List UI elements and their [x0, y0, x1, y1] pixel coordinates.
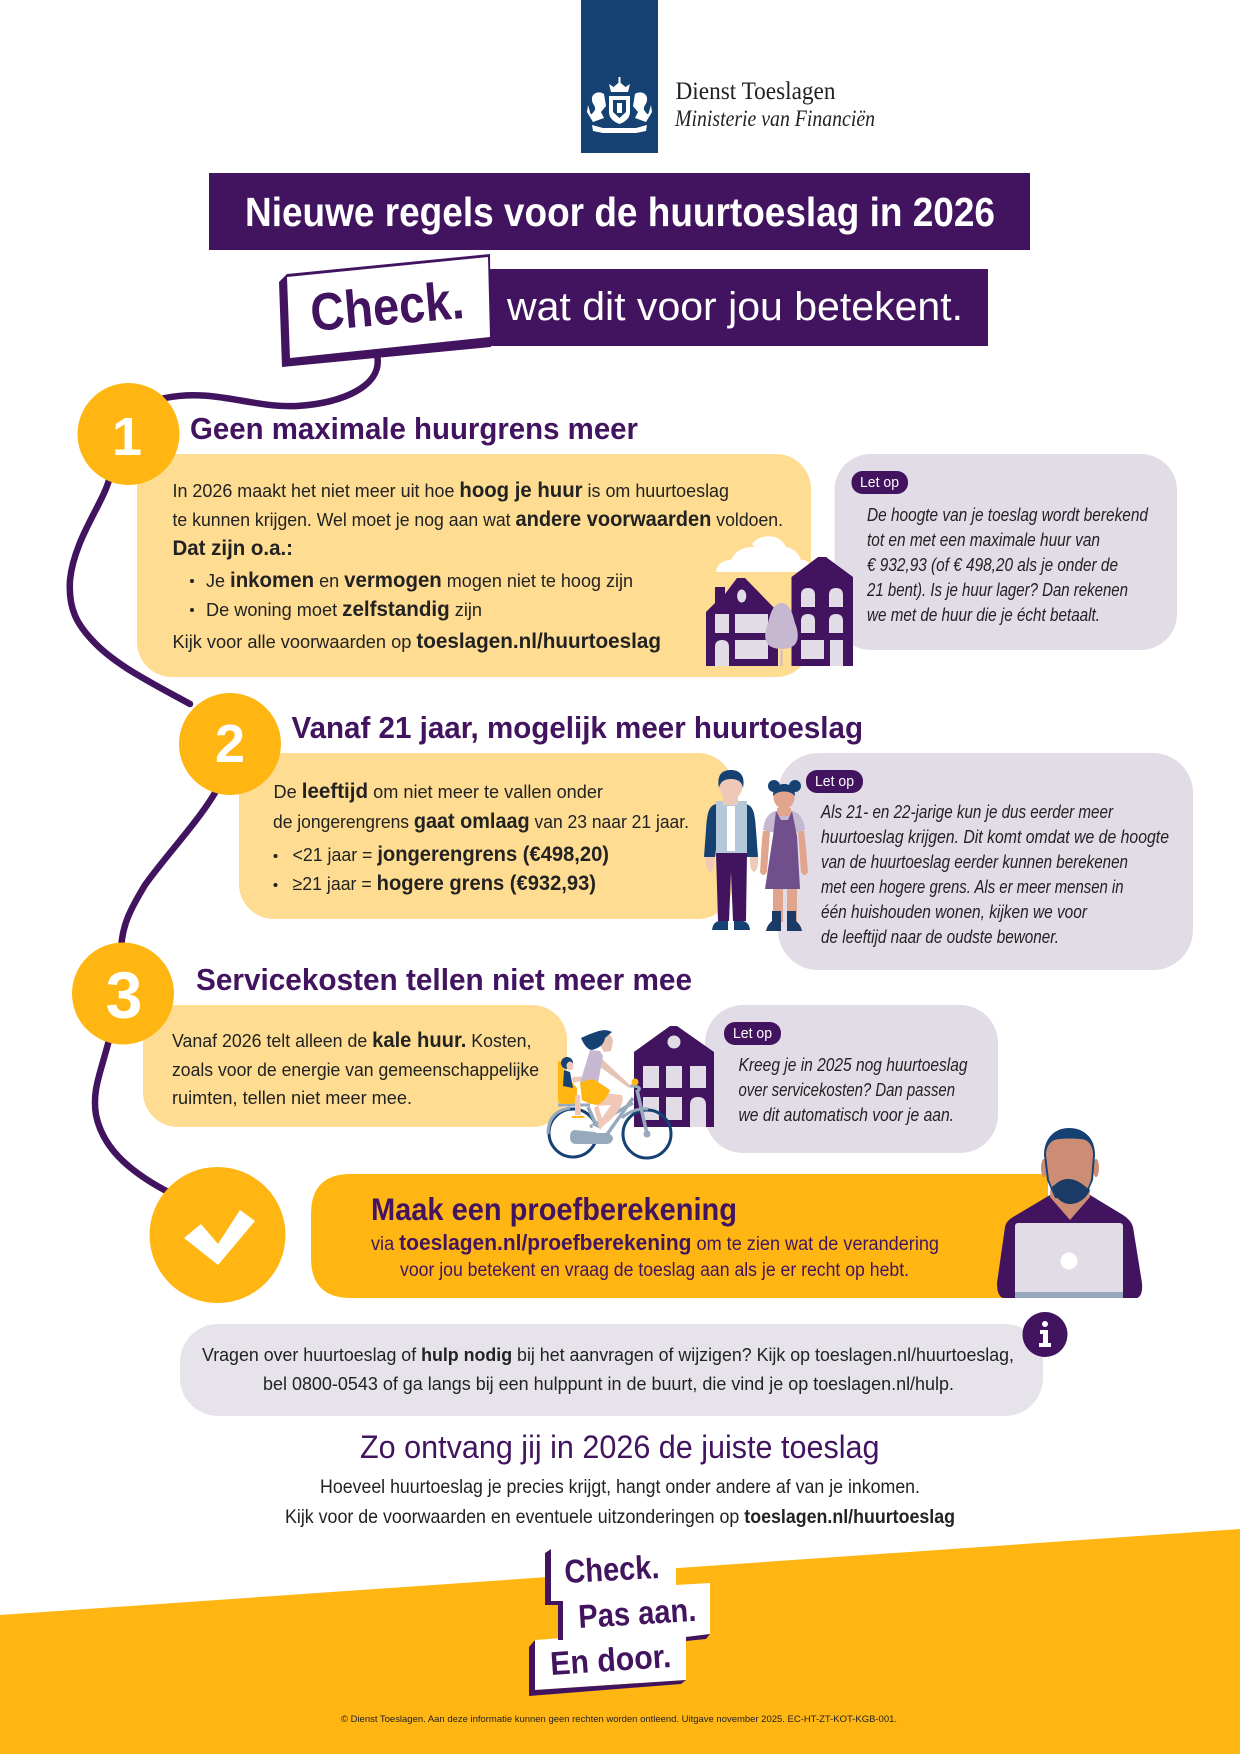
panel: step 1 let op [834, 454, 1177, 650]
icon: house [634, 1026, 714, 1127]
step number 1: 1 [112, 407, 142, 467]
icon: check circle [150, 1167, 286, 1303]
panel: step 3 [72, 942, 998, 1158]
logo: Dienst Toeslagen: Dienst Toeslagen [676, 78, 836, 105]
panel: step 3 let op: Let op [733, 1026, 772, 1042]
icon: man with laptop [997, 1128, 1142, 1298]
panel: step 2 let op: Let op [815, 774, 854, 790]
callout: proefberekening [311, 1174, 1048, 1298]
panel: step 2 let op [778, 753, 1193, 970]
route line [70, 358, 378, 1194]
panel: step 2 [179, 693, 1193, 970]
panel: step 1 yellow text: Kijk voor alle voorwaarden op toeslagen.nl/huurtoeslag [172, 630, 661, 653]
icon: houses with cloud and tree [706, 536, 853, 666]
panel: step 2 yellow text [239, 753, 733, 919]
logo: Dienst Toeslagen [581, 0, 875, 153]
panel: step 2 yellow text: De leeftijd om niet meer te vallen onder [274, 780, 603, 803]
panel: step 1 yellow text: Je inkomen en vermogen mogen niet te hoog zijn [206, 569, 633, 592]
closing heading: Zo ontvang jij in 2026 de juiste toeslag [360, 1429, 880, 1465]
callout: proefberekening: via toeslagen.nl/proefberekening om te zien wat de verandering [371, 1230, 939, 1255]
girl [760, 780, 808, 931]
panel: step 1 let op: we met de huur die je écht betaalt. [867, 605, 1100, 625]
panel: help information [180, 1324, 1043, 1416]
panel: step 3 yellow text: Vanaf 2026 telt alleen de kale huur. Kosten, [172, 1029, 532, 1052]
step number 3: 3 [106, 958, 142, 1032]
panel: step 3 let op: Kreeg je in 2025 nog huurtoeslag [738, 1055, 968, 1075]
slogan: Check. Pas aan. En door.: En door. [549, 1637, 672, 1682]
panel: step 3 yellow text: zoals voor de energie van gemeenschappelijke [172, 1059, 539, 1080]
slogan: Check. Pas aan. En door. [529, 1548, 710, 1696]
panel: step 1 yellow text [137, 454, 811, 677]
panel: step 2 yellow text: <21 jaar = jongerengrens (€498,20) [292, 843, 609, 866]
step number 3 [72, 942, 174, 1044]
boy [704, 770, 758, 930]
panel: step 1 let op: 21 bent). Is je huur lager? Dan rekenen [866, 580, 1128, 600]
panel: step 3 let op [705, 1005, 998, 1153]
panel: step 2 let op: één huishouden wonen, kijken we voor [821, 902, 1088, 922]
panel: step 2 let op: Als 21- en 22-jarige kun je dus eerder meer [820, 802, 1114, 822]
panel: step 3 let op: over servicekosten? Dan passen [738, 1080, 955, 1100]
panel: step 2 yellow text: ≥21 jaar = hogere grens (€932,93) [292, 872, 596, 895]
panel: step 3 let op: we dit automatisch voor je aan. [738, 1105, 954, 1125]
callout: proefberekening: voor jou betekent en vraag de toeslag aan als je er recht op hebt. [400, 1260, 909, 1281]
Check sign: Check. [308, 271, 466, 343]
closing text [285, 1476, 955, 1528]
panel: step 1 yellow text: In 2026 maakt het niet meer uit hoe hoog je huur is om huurtoeslag [172, 479, 729, 502]
panel: step 1 yellow text: Dat zijn o.a.: [172, 537, 293, 560]
logo: Dienst Toeslagen: Ministerie van Financiën [674, 106, 875, 131]
subtitle banner [485, 269, 988, 346]
icon: boy and girl [704, 770, 808, 931]
slogan: Check. Pas aan. En door.: Pas aan. [577, 1591, 697, 1635]
closing text: Kijk voor de voorwaarden en eventuele uitzonderingen op toeslagen.nl/huurtoeslag [285, 1506, 955, 1528]
panel: step 2 let op: van de huurtoeslag eerder kunnen berekenen [821, 852, 1128, 872]
panel: step 1 yellow text: De woning moet zelfstandig zijn [206, 598, 482, 621]
callout: proefberekening: Maak een proefberekening [371, 1191, 737, 1227]
panel: step 1 let op: Let op [860, 475, 899, 491]
copyright: © Dienst Toeslagen. Aan deze informatie kunnen geen rechten worden ontleend. Uitgave november 2025. EC-HT-ZT-KOT-KGB-001. [341, 1714, 897, 1725]
step number 1 [78, 383, 180, 485]
panel: step 3 yellow text [143, 1005, 567, 1127]
slogan: Check. Pas aan. En door.: Check. [563, 1548, 660, 1590]
heading: step 3: Servicekosten tellen niet meer mee [196, 962, 692, 997]
panel: step 3 yellow text: ruimten, tellen niet meer mee. [172, 1087, 412, 1108]
panel: step 2 let op: met een hogere grens. Als er meer mensen in [821, 877, 1124, 897]
panel: step 1 let op: tot en met een maximale huur van [867, 530, 1100, 550]
step number 2: 2 [215, 714, 245, 774]
panel: step 1 let op: € 932,93 (of € 498,20 als je onder de [867, 555, 1118, 575]
panel: help information: bel 0800-0543 of ga langs bij een hulppunt in de buurt, die vind je op toeslagen.nl/hulp. [263, 1373, 954, 1394]
panel: step 2 let op: de leeftijd naar de oudste bewoner. [821, 927, 1059, 947]
panel: step 2 yellow text: de jongerengrens gaat omlaag van 23 naar 21 jaar. [273, 810, 689, 833]
closing text: Hoeveel huurtoeslag je precies krijgt, hangt onder andere af van je inkomen. [320, 1476, 920, 1498]
Check sign [279, 254, 491, 367]
panel: step 1 [78, 383, 1177, 677]
panel: step 2 let op: huurtoeslag krijgen. Dit komt omdat we de hoogte [821, 827, 1169, 847]
icon: info [1022, 1312, 1068, 1357]
icon: royal coat of arms [587, 77, 652, 133]
heading: step 2: Vanaf 21 jaar, mogelijk meer huurtoeslag [292, 710, 863, 745]
panel: step 1 let op: De hoogte van je toeslag wordt berekend [867, 505, 1149, 525]
title banner: Nieuwe regels voor de huurtoeslag in 2026 [245, 189, 995, 235]
subtitle banner: wat dit voor jou betekent. [506, 285, 963, 329]
panel: step 1 yellow text: te kunnen krijgen. Wel moet je nog aan wat andere voorwaarden voldoen. [172, 508, 783, 531]
title banner [209, 173, 1030, 250]
panel: help information: Vragen over huurtoeslag of hulp nodig bij het aanvragen of wijzigen? Kijk op toeslagen.nl/huurtoeslag, [202, 1344, 1014, 1365]
footer yellow band [0, 1529, 1240, 1754]
icon: woman and child on bicycle [548, 1030, 671, 1158]
heading: step 1: Geen maximale huurgrens meer [190, 411, 638, 446]
step number 2 [179, 693, 281, 795]
